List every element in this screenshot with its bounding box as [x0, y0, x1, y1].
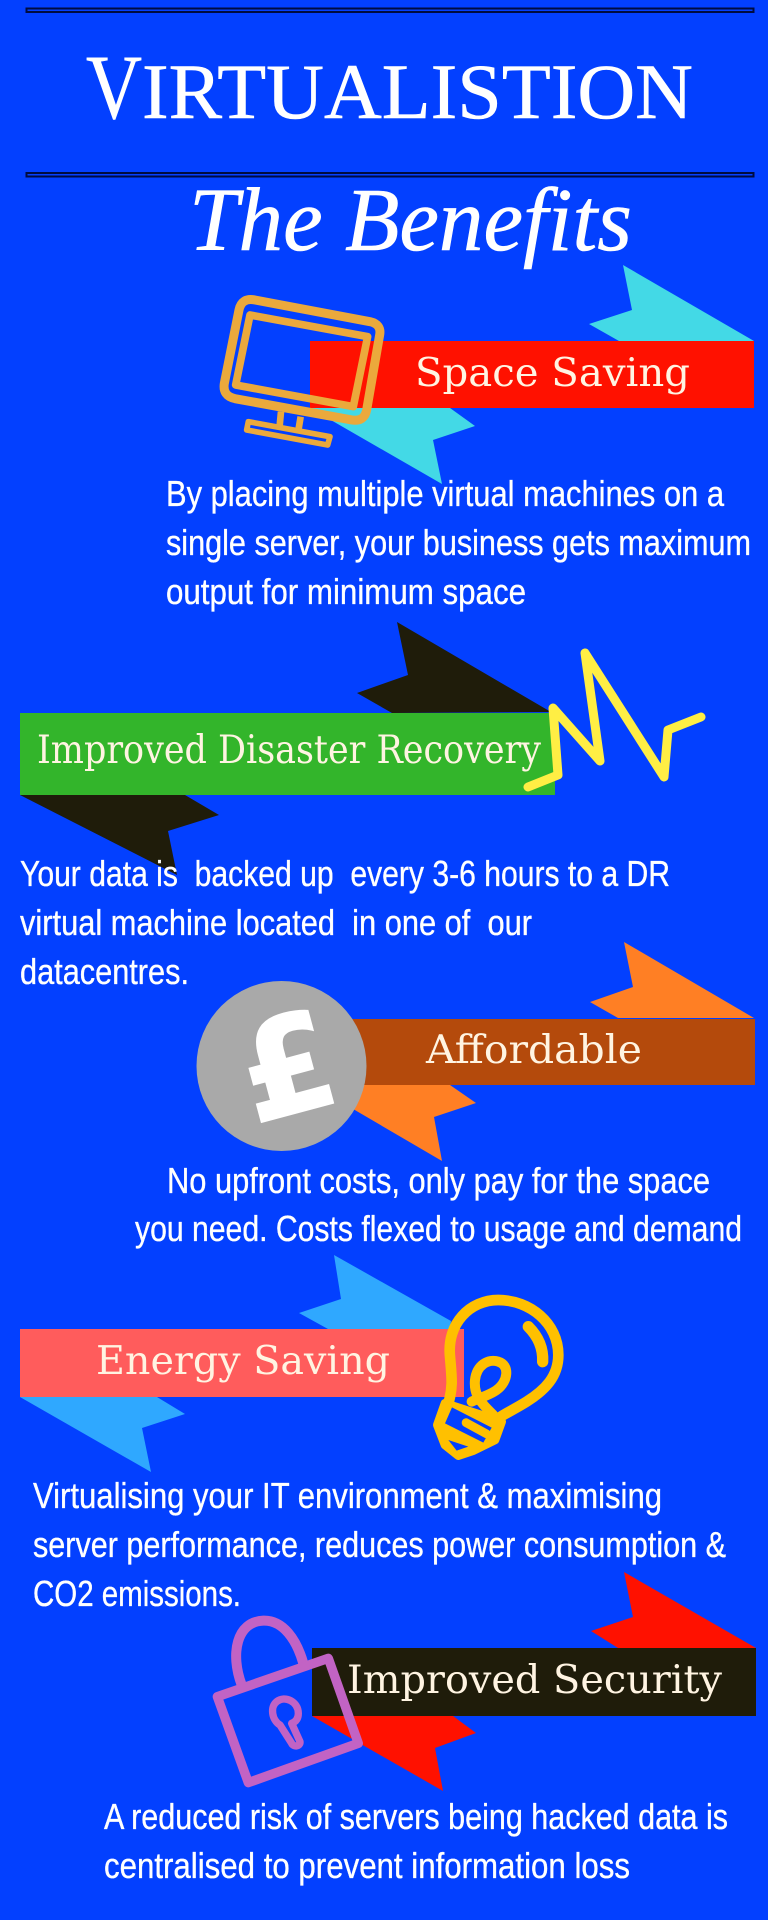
ribbon bar: [20, 1329, 464, 1397]
ribbon tail: top: [357, 622, 551, 713]
text: disaster recovery: datacentres.: [20, 951, 189, 992]
ribbon tail: top: [299, 1255, 451, 1329]
ribbon tail: bottom: [20, 795, 219, 875]
ribbon label: Energy Saving: [96, 1339, 390, 1384]
icon: padlock: [217, 1621, 358, 1783]
text: space saving: [166, 473, 751, 612]
text: improved security: centralised to prevent information loss: [104, 1845, 630, 1886]
ribbon bar: [312, 1648, 756, 1716]
icon: pound coin: £: [223, 982, 351, 1154]
ribbon: energy saving: [20, 1255, 558, 1472]
icon: pulse line: [528, 653, 701, 787]
icon: monitor: [224, 300, 380, 445]
text: space saving: output for minimum space: [166, 571, 526, 612]
ribbon bar: [20, 713, 555, 795]
text: disaster recovery: [20, 853, 670, 992]
ribbon label: Space Saving: [415, 351, 690, 396]
ribbon label: Affordable: [425, 1028, 642, 1073]
title: V: [86, 36, 142, 138]
ribbon tail: top: [591, 1572, 756, 1648]
ribbon label: Improved Disaster Recovery: [37, 728, 541, 773]
text: disaster recovery: virtual machine located in one of our: [20, 902, 532, 943]
ribbon: disaster recovery: [20, 622, 701, 875]
ribbon tail: top: [589, 265, 754, 341]
subtitle: The Benefits: [189, 171, 632, 270]
ribbon: space saving: [224, 265, 754, 484]
text: energy saving: CO2 emissions.: [33, 1573, 241, 1614]
title: IRTUALISTION: [142, 48, 693, 135]
ribbon bar: [312, 1019, 755, 1085]
ribbon: affordable: [196, 942, 755, 1161]
icon: light bulb: [437, 1300, 558, 1456]
ribbon tail: bottom: [310, 408, 475, 484]
ribbon bar: [310, 341, 754, 408]
ribbon tail: bottom: [312, 1085, 476, 1161]
text: improved security: [104, 1796, 728, 1886]
ribbon tail: bottom: [20, 1397, 185, 1472]
ribbon: improved security: [217, 1572, 756, 1791]
text: energy saving: Virtualising your IT environment & maximising: [33, 1475, 662, 1516]
text: affordable: [135, 1160, 742, 1249]
ribbon tail: bottom: [312, 1716, 476, 1791]
ribbon label: Improved Security: [347, 1658, 722, 1703]
text: energy saving: [33, 1475, 726, 1614]
ribbon tail: top: [590, 942, 754, 1018]
